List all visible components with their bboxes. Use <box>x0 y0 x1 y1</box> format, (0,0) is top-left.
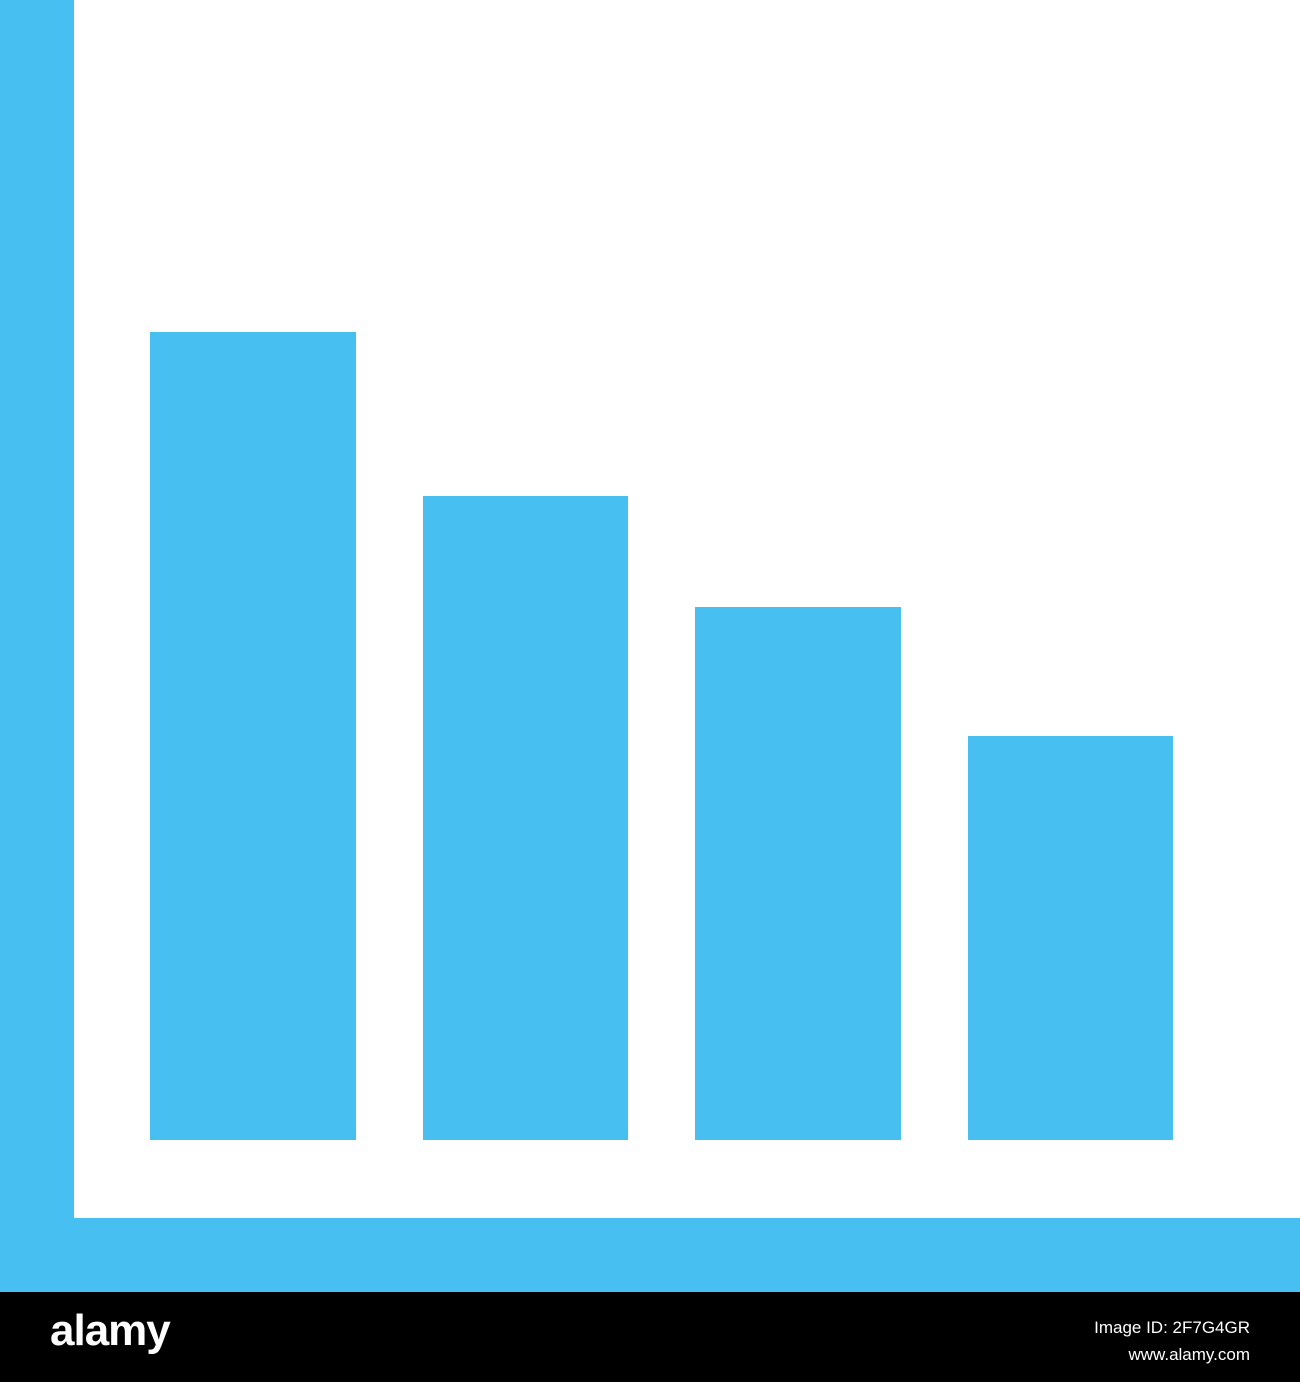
x axis <box>0 1218 1300 1292</box>
y axis <box>0 0 74 1292</box>
footer image id: www.alamy.com <box>1128 1345 1250 1364</box>
footer image id <box>1094 1318 1250 1364</box>
footer logo: alamy <box>50 1306 170 1355</box>
bar 4 <box>968 736 1173 1140</box>
bar 1 <box>150 332 356 1140</box>
bar 2 <box>423 496 628 1140</box>
bar 3 <box>695 607 901 1140</box>
footer image id: Image ID: 2F7G4GR <box>1094 1318 1250 1337</box>
footer bar <box>0 1292 1300 1382</box>
